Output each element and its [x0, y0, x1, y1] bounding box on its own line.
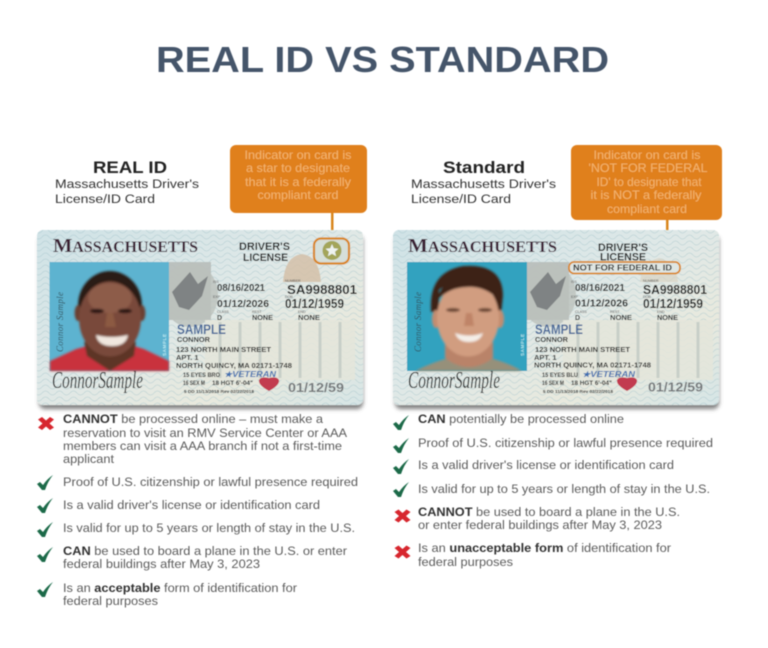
callout: star indicator — [230, 145, 367, 239]
card data fields: 16 SEX M — [183, 380, 205, 387]
heading: Standard — [411, 159, 556, 206]
card data fields: 18 HGT 6'-04" — [571, 380, 612, 387]
heading: REAL ID — [55, 159, 199, 206]
ghost signature: Connor Sample — [413, 292, 423, 352]
heading: Standard: Standard — [443, 159, 525, 177]
card data fields: NONE — [610, 315, 632, 322]
list item — [418, 505, 680, 532]
card data fields: APT. 1 — [534, 353, 557, 362]
callout: not for federal id indicator: compliant card — [607, 203, 687, 216]
list item: Is an acceptable form of identification for — [63, 581, 297, 595]
card data fields: SA9988801 — [287, 282, 357, 297]
callout: not for federal id indicator: ID' to designate that — [596, 176, 702, 189]
list item: federal purposes — [63, 594, 158, 608]
portrait photo: SAMPLE — [162, 334, 167, 356]
card data fields: END — [298, 310, 306, 314]
card data fields: END — [657, 310, 665, 314]
callout: not for federal id indicator: 'NOT FOR FEDERAL — [588, 162, 708, 175]
signature: ConnorSample — [408, 368, 500, 394]
card data fields: 08/16/2021 — [575, 283, 625, 294]
icon: green check — [393, 482, 409, 497]
callout: star indicator: that it is a federally — [245, 176, 351, 189]
state name: MASSACHUSETTS — [53, 235, 198, 257]
icon: green check — [37, 547, 53, 562]
card data fields: SAMPLE — [177, 322, 226, 337]
icon: red cross — [394, 510, 410, 522]
list item: Proof of U.S. citizenship or lawful presence required — [418, 436, 713, 450]
heading: REAL ID: Massachusetts Driver's — [55, 177, 199, 191]
list item: federal buildings after May 3, 2023 — [63, 557, 260, 571]
panel: REAL ID — [37, 145, 367, 608]
card data fields: CONNOR — [535, 337, 568, 344]
list item: or enter federal buildings after May 3, 2023 — [418, 518, 662, 532]
card data fields: NONE — [657, 315, 678, 322]
not for federal id marker — [569, 262, 680, 274]
card data fields: CONNOR — [177, 337, 210, 344]
list item: Is a valid driver's license or identification card — [63, 498, 320, 512]
feature list: REAL ID — [37, 412, 358, 608]
list item: reservation to visit an RMV Service Center or AAA — [63, 426, 348, 440]
card data fields: 01/12/1959 — [285, 297, 344, 311]
callout: star indicator: Indicator on card is — [244, 149, 352, 162]
card data fields: DOB — [643, 295, 651, 299]
card data fields: SA9988801 — [643, 282, 707, 297]
list item: applicant — [63, 452, 115, 466]
card data fields: NONE — [298, 315, 320, 322]
card data fields: REST — [252, 310, 262, 314]
list item — [63, 412, 348, 466]
list item: CAN be used to board a plane in the U.S. or enter — [63, 544, 347, 558]
card data fields: SAMPLE — [535, 322, 583, 337]
callout: star indicator: a star to designate — [246, 162, 350, 175]
card data fields: 16 SEX M — [542, 380, 564, 387]
card data fields: 123 NORTH MAIN STREET — [176, 345, 271, 354]
icon: green check — [393, 438, 409, 453]
icon: green check — [37, 522, 53, 537]
card data fields: DOB — [285, 295, 293, 299]
list item: Is a valid driver's license or identification card — [418, 458, 674, 472]
title: REAL ID VS STANDARD — [156, 39, 609, 80]
card data fields: ISS — [213, 280, 219, 284]
card data fields: 15 EYES BRO — [183, 372, 220, 379]
card data fields — [534, 279, 707, 394]
card data fields: ISS — [571, 280, 577, 284]
list item: CANNOT be used to board a plane in the U.S. — [418, 505, 680, 519]
icon: star indicator — [314, 238, 349, 264]
portrait photo: SAMPLE — [520, 334, 525, 356]
icon: green check — [37, 582, 53, 597]
portrait photo — [407, 262, 527, 371]
heading: REAL ID: License/ID Card — [55, 192, 155, 206]
card data fields: NUMBER — [643, 279, 659, 283]
license card: REAL ID — [37, 230, 363, 409]
icon: heart — [617, 377, 637, 391]
list item — [63, 581, 297, 608]
icon: red cross — [38, 417, 54, 430]
card data fields: 18 HGT 6'-04" — [212, 380, 253, 387]
icon: green check — [393, 415, 409, 430]
card data fields: ★VETERAN — [582, 370, 635, 379]
card data fields: 01/12/2026 — [575, 298, 628, 310]
icon: red cross — [394, 546, 410, 558]
card data fields: 123 NORTH MAIN STREET — [535, 345, 630, 354]
list item: Is an unacceptable form of identification for — [418, 541, 671, 555]
card data fields: 01/12/59 — [288, 380, 344, 395]
list item: Proof of U.S. citizenship or lawful presence required — [63, 475, 358, 489]
card data fields: CLASS — [575, 310, 587, 314]
heading: REAL ID: REAL ID — [93, 159, 167, 177]
card data fields: APT. 1 — [176, 353, 199, 362]
license card: REAL ID: LICENSE — [243, 252, 288, 264]
list item: CAN potentially be processed online — [418, 412, 624, 426]
feature list: Standard — [393, 412, 713, 569]
ghost signature: Connor Sample — [55, 292, 65, 352]
icon: heart — [259, 377, 279, 391]
list item: Is valid for up to 5 years or length of stay in the U.S. — [418, 482, 710, 496]
portrait photo — [50, 262, 169, 371]
card type: DRIVER'S — [239, 241, 290, 253]
icon: green check — [393, 459, 409, 474]
card data fields: 01/12/1959 — [643, 297, 703, 311]
panel: Standard — [393, 145, 722, 569]
callout: not for federal id indicator — [571, 145, 722, 263]
list item: federal purposes — [418, 555, 513, 569]
card data fields: NORTH QUINCY, MA 02171-1748 — [176, 361, 292, 370]
heading: Standard: Massachusetts Driver's — [411, 177, 556, 191]
callout: not for federal id indicator: Indicator on card is — [594, 149, 701, 162]
not for federal id marker: NOT FOR FEDERAL ID — [573, 264, 672, 272]
signature: ConnorSample — [52, 368, 143, 394]
card data fields: EXP — [571, 295, 579, 299]
card data fields: NORTH QUINCY, MA 02171-1748 — [534, 360, 651, 370]
card data fields: D — [575, 315, 580, 322]
card data fields: D — [217, 315, 222, 322]
license card: Standard: LICENSE — [600, 252, 646, 264]
callout: star indicator: compliant card — [258, 189, 338, 202]
list item — [63, 544, 347, 571]
icon: green check — [37, 498, 53, 513]
card data fields: REST — [610, 310, 620, 314]
card data fields: 08/16/2021 — [217, 283, 265, 294]
callout: not for federal id indicator: it is NOT a federally — [590, 189, 702, 202]
card data fields — [176, 279, 357, 395]
card type: DRIVER'S — [598, 242, 648, 254]
list item — [418, 541, 671, 569]
heading: Standard: License/ID Card — [411, 192, 511, 206]
card data fields: EXP — [213, 295, 221, 299]
icon: green check — [37, 475, 53, 490]
license card: Standard — [393, 230, 719, 409]
list item: members can visit a AAA branch if not a first-time — [63, 439, 342, 453]
card data fields: CLASS — [217, 310, 229, 314]
card data fields: 5 DD 11/13/2018 Rev 02/22/2018 — [184, 389, 255, 394]
card data fields: NONE — [252, 315, 273, 322]
card data fields: 01/12/2026 — [217, 298, 269, 310]
list item: CANNOT be processed online – must make a — [63, 412, 323, 426]
card data fields: 15 EYES BLU — [542, 372, 578, 379]
card data fields: ★VETERAN — [224, 370, 276, 379]
state name: MASSACHUSETTS — [408, 235, 557, 257]
card data fields: NUMBER — [285, 279, 301, 283]
card data fields: 01/12/59 — [648, 380, 703, 394]
card data fields: 5 DD 11/13/2018 Rev 02/22/2018 — [543, 389, 614, 394]
list item: Is valid for up to 5 years or length of stay in the U.S. — [63, 521, 355, 535]
